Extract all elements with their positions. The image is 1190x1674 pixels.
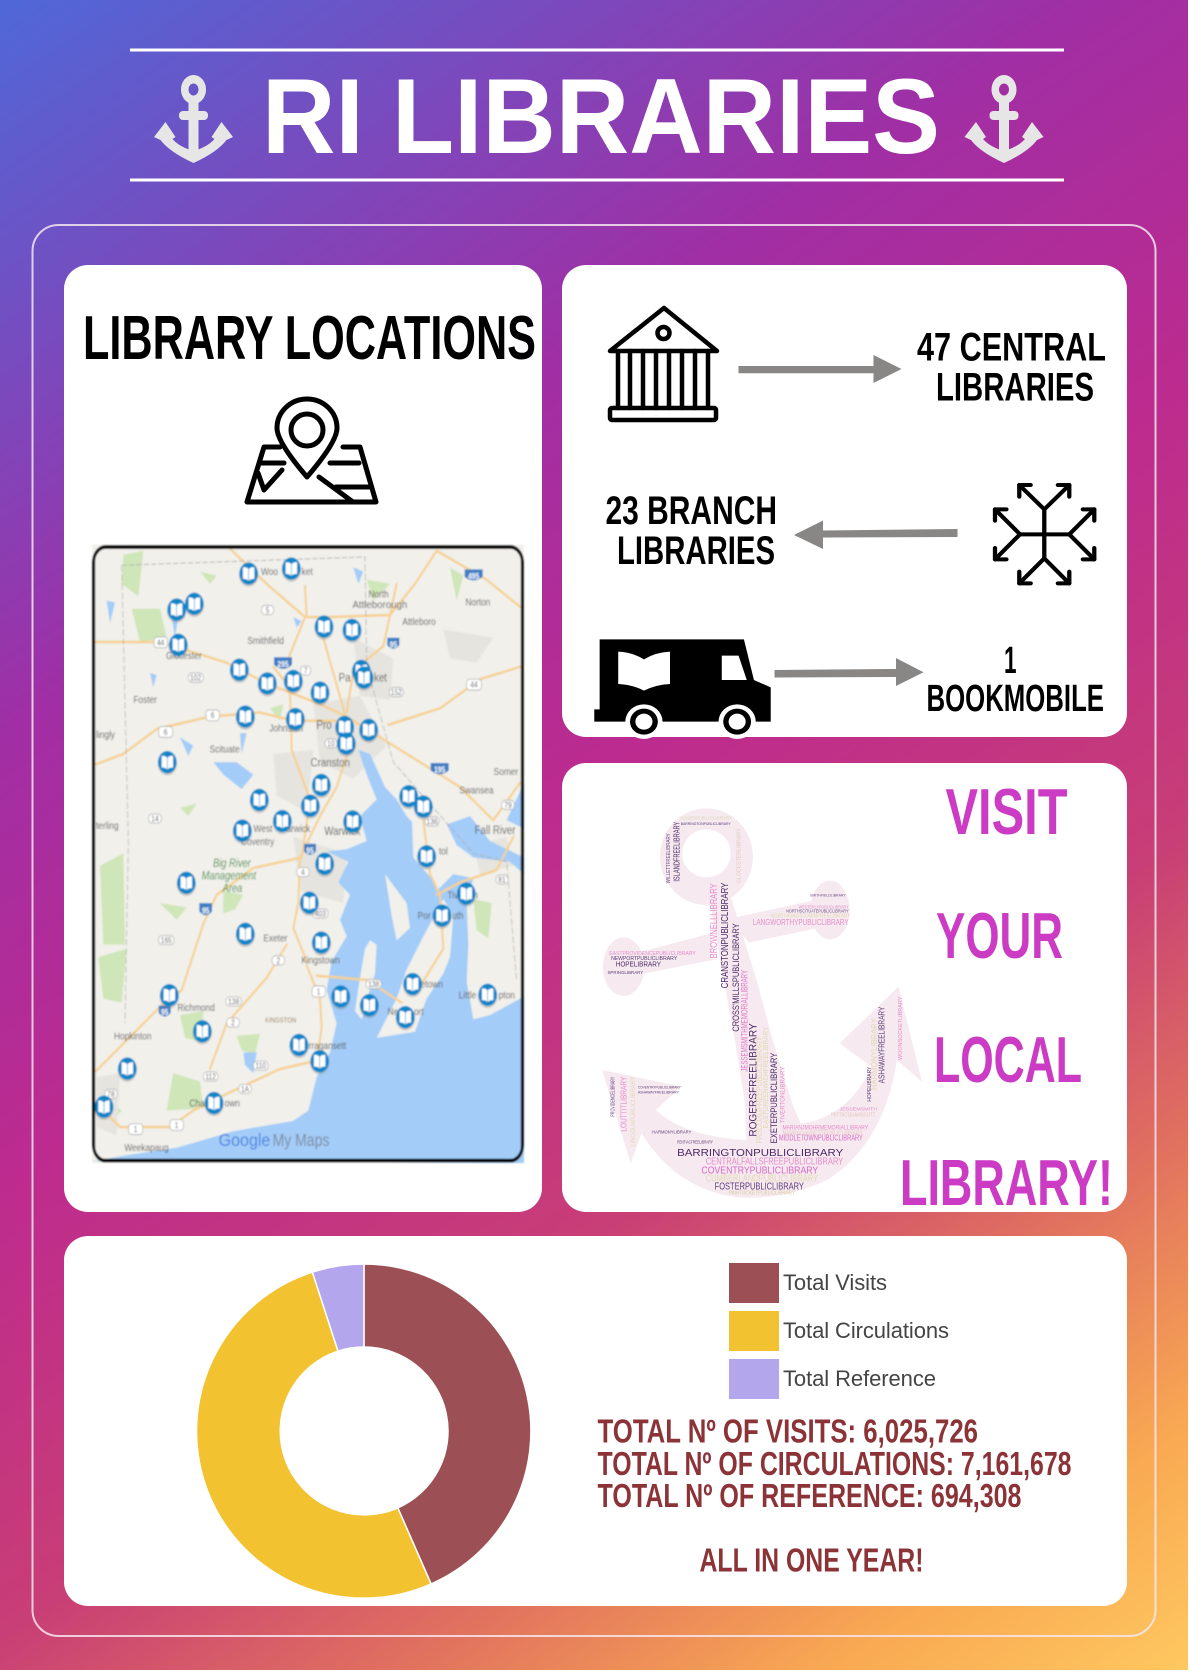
icon: library building — [610, 308, 717, 420]
map labels: Norton — [465, 596, 490, 608]
map labels: arwick — [287, 822, 311, 834]
icon: bookmobile van — [594, 639, 771, 739]
map road shields: 7 — [304, 666, 308, 676]
map labels — [96, 565, 518, 1153]
map labels: pton — [499, 989, 515, 1001]
text: 23 branch libraries: LIBRARIES — [617, 529, 775, 573]
segment: total reference — [312, 1264, 364, 1351]
text: 1 bookmobile: 1 — [1004, 640, 1016, 682]
map labels: Attleborough — [352, 598, 407, 610]
anchor library names: PAWTUCKETPUBLICLIBRARY — [729, 1190, 795, 1196]
map labels: n — [473, 889, 478, 901]
map road shields: 44 — [157, 638, 164, 647]
map road shields: 138 — [228, 997, 239, 1007]
map interstate shields: 295 — [277, 660, 289, 669]
map water — [93, 567, 524, 1163]
map labels: ket — [302, 565, 313, 577]
map road shields: 2 — [231, 1018, 235, 1028]
anchor library names: CUMBERLANDPUBLICLIBRARY — [706, 1174, 818, 1185]
anchor library names: JESSEMSMITHMEMORIALLIBRARY — [739, 970, 750, 1072]
map road shields: 165 — [161, 935, 172, 945]
anchor library names: CRANSTONPUBLICLIBRARY — [720, 882, 731, 988]
text: visit your local library: LOCAL — [934, 1023, 1082, 1096]
map labels: North — [368, 588, 389, 600]
anchor library names: COVENTRYPUBLICLIBRARY — [701, 1166, 818, 1176]
heading: library locations: LIBRARY LOCATIONS — [83, 304, 536, 373]
map labels: Cranston — [311, 757, 350, 770]
anchor library names: HARMONYLIBRARY — [869, 1018, 879, 1090]
map road shields — [105, 605, 514, 1135]
anchor library names: NORTHKINGSTOWNFREELIBRARY — [771, 914, 851, 920]
anchor library names: WILLETTFREELIBRARY — [666, 833, 672, 883]
anchor silhouette — [602, 808, 922, 1198]
map labels: lingly — [96, 728, 115, 740]
map labels: Glocester — [166, 649, 202, 661]
map interstate shields: 195 — [434, 765, 445, 775]
anchor library names: NORTHSCITUATEPUBLICLIBRARY — [786, 909, 849, 914]
anchor library names: PASCOAGFREEPUBLICLIBRARY — [754, 1036, 764, 1143]
anchor library names: SMITHFIELDLIBRARY — [810, 893, 846, 898]
map road shields: 78 — [107, 1089, 115, 1099]
map labels: Attleboro — [402, 615, 436, 627]
arrow to branch libraries — [794, 520, 958, 549]
map road shields: 138 — [368, 979, 379, 989]
anchor library names: PENTIACFREELIBRARY — [677, 1139, 713, 1144]
totals text: TOTAL Nº OF REFERENCE: 694,308 — [598, 1477, 1022, 1514]
map state border — [122, 557, 517, 1023]
text: 1 bookmobile: BOOKMOBILE — [926, 678, 1104, 720]
map interstate shields: 95 — [161, 1007, 168, 1017]
map labels: tol — [439, 845, 448, 857]
map road shields: 152 — [391, 687, 402, 697]
text: 47 central libraries: 47 CENTRAL — [917, 326, 1106, 370]
map road shields: 10 — [327, 739, 335, 749]
map labels: Warwick — [324, 825, 361, 838]
map road shields: 79 — [504, 800, 512, 810]
legend: Total Visits — [783, 1270, 887, 1295]
map road shields: 1 — [317, 987, 321, 997]
anchor library names: HARMONYLIBRARY — [652, 1129, 692, 1135]
anchor library names: SPRINGLIBRARY — [607, 970, 643, 975]
anchor library names: HOPELIBRARY — [867, 1066, 873, 1102]
map road shields: 14 — [151, 814, 159, 824]
map frame — [94, 547, 522, 1161]
map road shields: 5 — [266, 605, 270, 615]
map labels: Kingstown — [301, 953, 340, 965]
text: 23 branch libraries — [606, 489, 777, 573]
map labels: West — [254, 822, 273, 834]
map labels: Swansea — [459, 784, 494, 796]
anchor library names: BARRINGTONPUBLICLIBRARY — [677, 1148, 843, 1159]
map labels: Somer — [494, 765, 518, 777]
anchor library names: WOONSOCKETLIBRARY — [898, 996, 904, 1060]
legend — [729, 1263, 949, 1399]
text: visit your local library: YOUR — [936, 899, 1063, 972]
anchor library names: ASHAWAYFREELIBRARY — [638, 1089, 679, 1094]
map labels: Big River — [213, 857, 251, 870]
anchor library names: EASTPROVIDENCEPUBLICLIBRARY — [609, 951, 696, 957]
map labels: KINGSTON — [265, 1017, 296, 1025]
anchor library names: MARIANJMOHRMEMORIALLIBRARY — [782, 1125, 868, 1131]
anchor library names: ROGERSFREELIBRARY — [748, 1023, 760, 1137]
map road shields: 102 — [190, 673, 201, 683]
map road shields: 81 — [498, 875, 506, 885]
anchor library names: PROVIDENCELIBRARY — [611, 1076, 617, 1117]
anchor library names: NARRAGANSETTPUBLICLIBRARY — [782, 1130, 863, 1137]
map road shields: 112 — [205, 1072, 216, 1082]
text: 47 central libraries: LIBRARIES — [936, 366, 1094, 410]
anchor library names: ISLANDFREELIBRARY — [671, 821, 682, 882]
map roads — [96, 549, 520, 1127]
google my maps logo — [219, 1132, 329, 1151]
map road shields: 1A — [241, 1084, 249, 1094]
map interstate shields: 95 — [306, 846, 314, 856]
anchor library names: FOSTERPUBLICLIBRARY — [715, 1182, 804, 1192]
anchor library names: CROSS'MILLSPUBLICLIBRARY — [731, 923, 741, 1032]
totals text: ALL IN ONE YEAR! — [700, 1542, 924, 1578]
map interstate shields: 95 — [390, 640, 397, 650]
map labels: Pa — [339, 671, 351, 685]
map interstate shields: 95 — [202, 906, 209, 916]
map road shields: 6 — [164, 727, 168, 737]
map interstate shields — [159, 569, 483, 1017]
word cloud anchor — [602, 808, 922, 1198]
anchor library names: ASHAWAYFREELIBRARY — [877, 1007, 886, 1083]
map labels: Weekapaug — [124, 1141, 169, 1153]
map road shields: 136 — [426, 817, 438, 827]
map land patches — [98, 551, 492, 1125]
map labels: Smithfield — [247, 634, 284, 646]
anchor library names: LANGWORTHYPUBLICLIBRARY — [753, 917, 849, 927]
anchor library names: BARRINGTONPUBLICLIBRARY — [681, 821, 731, 826]
map road shields: 44 — [470, 680, 478, 690]
map — [92, 545, 524, 1163]
anchor library names: BROWNELLLIBRARY — [709, 883, 720, 958]
google my maps logo: My Maps — [273, 1132, 329, 1151]
map labels: Management — [202, 870, 257, 883]
text: 47 central libraries — [917, 326, 1106, 410]
icon: map pin — [247, 399, 376, 502]
anchor library names: LINCOLNPUBLICLIBRARY — [630, 1077, 637, 1147]
panel: visit your local library — [562, 763, 1127, 1219]
arrow to bookmobile — [774, 658, 924, 686]
map labels: Coventry — [241, 835, 275, 847]
map labels: terling — [96, 819, 119, 831]
map road shields: 6 — [211, 711, 215, 720]
map labels: Scituate — [210, 743, 240, 755]
anchor library names: EASTGREENWICHFREELIBRARY — [763, 1026, 770, 1128]
text: 1 bookmobile — [926, 640, 1104, 720]
anchor library names: ESSEXPUBLICLIBRARY — [681, 815, 733, 821]
map labels: Woo — [261, 565, 278, 577]
title: RI LIBRARIES — [262, 56, 940, 176]
panel: library counts — [562, 265, 1127, 739]
map interstate shields: 495 — [468, 571, 479, 581]
legend: Total Circulations — [783, 1318, 949, 1343]
map labels: Fall River — [475, 824, 516, 837]
anchor library names: LOUTTITLIBRARY — [618, 1076, 628, 1132]
text: visit your local library: VISIT — [946, 775, 1068, 848]
map labels: Area — [222, 882, 242, 895]
map road shields: 110 — [255, 1061, 266, 1071]
map labels: Por — [418, 909, 431, 921]
icon: left anchor — [154, 75, 233, 163]
anchor library names: WESTERLYPUBLICLIBRARY — [799, 904, 849, 910]
map labels: uth — [452, 909, 464, 921]
map labels: Hopkinton — [114, 1030, 151, 1042]
map markers — [94, 557, 497, 1120]
anchor library names: GLOCESTERLIBRARY — [737, 828, 743, 883]
map labels: Johnston — [269, 722, 303, 734]
map labels: Little — [459, 989, 476, 1001]
map labels: Exeter — [263, 932, 287, 944]
anchor library names: PETTACQUAMSCUTT — [831, 1113, 876, 1119]
map road shields: 2 — [276, 956, 280, 965]
map labels: Foster — [133, 693, 157, 705]
google my maps logo: Google — [219, 1132, 271, 1151]
anchor library names: JESSEMSMITH — [840, 1107, 878, 1113]
map labels: etown — [421, 978, 443, 990]
anchor library names: CENTRALFALLSFREEPUBLICLIBRARY — [706, 1157, 843, 1167]
totals text — [598, 1412, 1072, 1578]
map road shields: 1 — [134, 1124, 138, 1134]
donut chart — [197, 1264, 531, 1598]
map labels: own — [225, 1096, 240, 1109]
map road shields: 1 — [175, 1120, 179, 1130]
panel: annual totals — [64, 1236, 1127, 1606]
panel: library locations — [64, 265, 542, 1212]
text: visit your local library — [900, 775, 1113, 1219]
anchor library names: NEWPORTPUBLICLIBRARY — [611, 956, 677, 962]
map labels: Richmond — [177, 1001, 215, 1013]
anchor library names: MIDDLETOWNPUBLICLIBRARY — [779, 1133, 863, 1143]
segment: total visits — [364, 1264, 531, 1584]
legend: Total Reference — [783, 1366, 936, 1391]
map road shields: 4 — [301, 867, 305, 877]
arrow to central libraries — [738, 355, 902, 383]
anchor library names: TIVERTONLIBRARY — [779, 1067, 786, 1123]
map labels: ort — [414, 1005, 424, 1017]
map labels: rragansett — [309, 1039, 346, 1051]
map labels: Cha — [189, 1096, 205, 1109]
map labels: ket — [374, 671, 387, 685]
outer frame — [32, 225, 1156, 1636]
map islands — [355, 812, 453, 1038]
map urban areas — [97, 630, 513, 1135]
map labels: Ne — [388, 1005, 398, 1017]
segment: total circulations — [197, 1272, 431, 1598]
map labels: Tiv — [447, 889, 458, 901]
anchor library names: COVENTRYPUBLICLIBRARY — [638, 1084, 681, 1089]
title banner — [130, 48, 1064, 182]
anchor library names — [607, 815, 904, 1196]
map labels: Pro — [316, 719, 332, 732]
icon: branching arrows — [995, 485, 1094, 583]
text: 23 branch libraries: 23 BRANCH — [606, 489, 777, 533]
anchor library names: EXETERPUBLICLIBRARY — [769, 1053, 779, 1143]
map road shields: 403 — [315, 909, 326, 919]
icon: right anchor — [964, 75, 1044, 163]
totals text: TOTAL Nº OF VISITS: 6,025,726 — [598, 1412, 978, 1450]
anchor library names: HOPELIBRARY — [616, 960, 661, 969]
